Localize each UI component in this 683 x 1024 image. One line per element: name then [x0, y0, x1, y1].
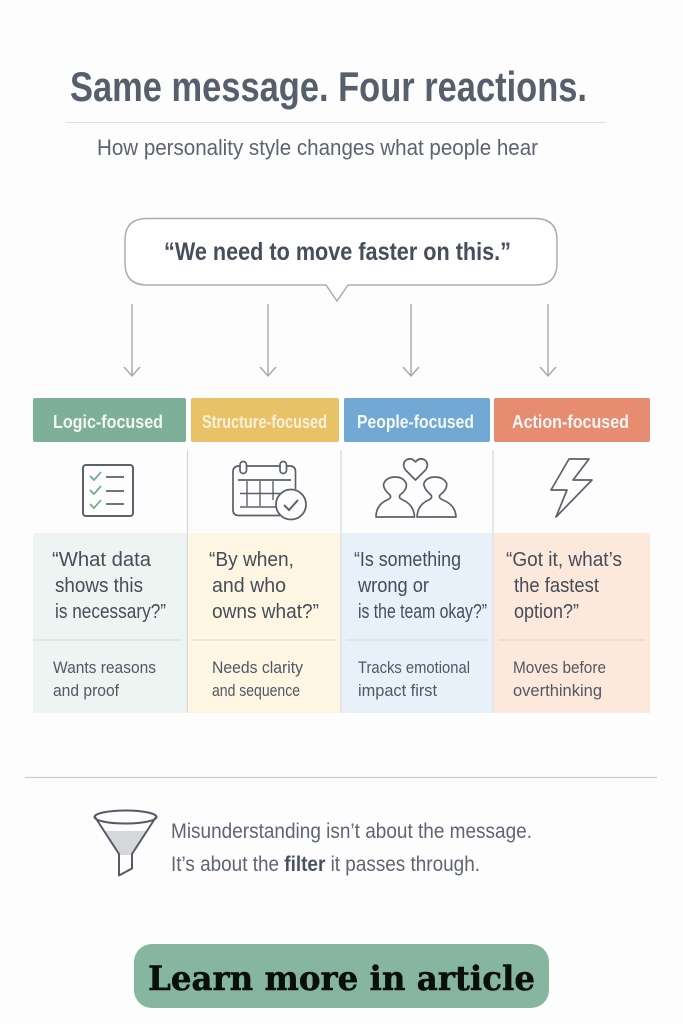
quote card: logic-focused: “What data: [52, 549, 152, 571]
quote card: structure-focused: and sequence: [212, 681, 300, 700]
quote card: structure-focused: “By when,: [209, 549, 294, 571]
quote card: structure-focused: owns what?”: [212, 601, 319, 623]
icon: funnel: [94, 810, 156, 876]
takeaway text: [171, 820, 532, 876]
button: learn more: Learn more in article: [148, 959, 535, 999]
header: logic-focused: [33, 398, 186, 442]
header: logic-focused: Logic-focused: [53, 412, 163, 432]
icon: lightning bolt: [551, 459, 592, 517]
title: Same message. Four reactions.: [70, 63, 587, 110]
takeaway text: It’s about the filter it passes through.: [171, 853, 480, 876]
takeaway text: Misunderstanding isn’t about the message.: [171, 820, 532, 843]
icon: checklist: [83, 465, 133, 516]
quote card: logic-focused: shows this: [55, 575, 143, 597]
arrows from bubble to columns: [124, 304, 556, 376]
header: structure-focused: Structure-focused: [202, 412, 327, 432]
quote card: people-focused: wrong or: [357, 575, 429, 597]
header: structure-focused: [191, 398, 339, 442]
quote card: structure-focused: Needs clarity: [212, 658, 303, 677]
subtitle: How personality style changes what people hear: [97, 135, 538, 160]
quote card: people-focused: “Is something: [354, 549, 461, 571]
quote card: logic-focused: and proof: [53, 681, 119, 700]
quote card: people-focused: Tracks emotional: [358, 658, 470, 677]
header: action-focused: [494, 398, 650, 442]
bubble quote: “We need to move faster on this.”: [164, 238, 511, 266]
panel: logic-focused: [33, 398, 187, 713]
quote card: action-focused: Moves before: [513, 658, 606, 677]
quote card: logic-focused: Wants reasons: [53, 658, 156, 677]
quote card: action-focused: the fastest: [514, 575, 599, 597]
quote card: logic-focused: is necessary?”: [55, 601, 166, 623]
quote card: action-focused: “Got it, what’s: [506, 549, 622, 571]
panel: action-focused: [494, 398, 650, 713]
quote card: people-focused: is the team okay?”: [358, 601, 487, 623]
quote card: people-focused: impact first: [358, 681, 437, 700]
quote card: structure-focused: and who: [212, 575, 286, 597]
quote card: logic-focused: [33, 533, 187, 713]
icon: calendar with check: [233, 462, 306, 520]
header: action-focused: Action-focused: [512, 412, 629, 432]
quote card: people-focused: [342, 533, 492, 713]
panel: structure-focused: [189, 398, 341, 713]
speech bubble: [125, 218, 557, 301]
header: people-focused: People-focused: [357, 412, 474, 432]
quote card: action-focused: [494, 533, 650, 713]
quote card: action-focused: overthinking: [513, 681, 602, 700]
button: learn more: [134, 944, 549, 1008]
quote card: action-focused: option?”: [514, 601, 579, 623]
quote card: structure-focused: [189, 533, 341, 713]
panel: people-focused: [342, 398, 492, 713]
icon: two people and heart: [376, 459, 456, 517]
header: people-focused: [344, 398, 490, 442]
